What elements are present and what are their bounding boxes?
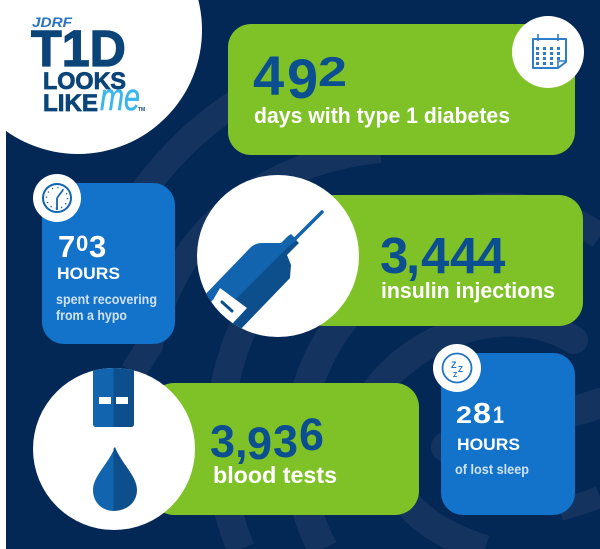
number: 3,444 bbox=[380, 227, 506, 284]
number: 281: 8 bbox=[473, 398, 491, 430]
icon: sleep bbox=[433, 344, 481, 392]
number: 3,936: 3 bbox=[273, 416, 298, 467]
number: 703: 3 bbox=[89, 229, 106, 264]
panel: insulin injections bbox=[300, 195, 583, 326]
number: 281: 1 bbox=[493, 402, 504, 429]
number: 3,936 bbox=[210, 409, 324, 469]
number: 3,444: 4 bbox=[421, 227, 450, 284]
logo: JDRF T1D Looks Like Me: me bbox=[100, 77, 140, 119]
logo: JDRF T1D Looks Like Me: TM bbox=[138, 107, 145, 113]
text: spent recovering from a hypo: from a hypo bbox=[56, 308, 127, 323]
background rings bbox=[133, 100, 600, 549]
label: hours: HOURS bbox=[457, 435, 520, 454]
panel: blood tests bbox=[150, 383, 419, 515]
logo: JDRF T1D Looks Like Me: LIKE bbox=[43, 90, 98, 117]
number: 3,444: 4 bbox=[450, 227, 479, 284]
icon: calendar bbox=[512, 16, 584, 88]
number: 3,444: 3 bbox=[380, 227, 408, 284]
text: spent recovering from a hypo bbox=[56, 292, 157, 323]
number: 492: 9 bbox=[287, 47, 318, 110]
icon: clock bbox=[33, 174, 81, 222]
number: 703: 7 bbox=[58, 229, 75, 264]
number: 3,936: , bbox=[235, 416, 248, 467]
logo: JDRF T1D Looks Like Me: T1D bbox=[31, 20, 126, 77]
panel: days with type 1 diabetes bbox=[228, 16, 584, 155]
logo: JDRF T1D Looks Like Me: JDRF bbox=[32, 15, 73, 30]
number: 3,936: 6 bbox=[299, 409, 324, 460]
label: days with type 1 diabetes: days with type 1 diabetes bbox=[254, 103, 510, 128]
label: hours: HOURS bbox=[57, 264, 120, 283]
text: of lost sleep: of lost sleep bbox=[455, 462, 529, 477]
number: 492 bbox=[253, 44, 347, 110]
icon: sleep: Z bbox=[458, 365, 463, 374]
icon: insulin pen bbox=[190, 175, 359, 345]
panel: logo disc bbox=[0, 0, 202, 549]
panel: hours recovering from a hypo bbox=[33, 174, 175, 344]
number: 492: 4 bbox=[253, 44, 284, 107]
panel: hours of lost sleep bbox=[433, 344, 575, 515]
logo: JDRF T1D Looks Like Me: LOOKS bbox=[43, 68, 126, 95]
number: 703: 0 bbox=[76, 231, 88, 256]
icon: sleep: Z bbox=[451, 360, 457, 370]
number: 3,936: 9 bbox=[247, 418, 272, 469]
number: 3,444: , bbox=[406, 227, 420, 284]
number: 3,444: 4 bbox=[477, 227, 506, 284]
logo: JDRF T1D Looks Like Me bbox=[31, 15, 145, 119]
label: blood tests: blood tests bbox=[213, 462, 337, 488]
text: spent recovering from a hypo: spent recovering bbox=[56, 292, 157, 307]
number: 281 bbox=[456, 398, 504, 430]
number: 492: 2 bbox=[318, 48, 347, 95]
number: 703 bbox=[58, 229, 106, 264]
icon: sleep: Z bbox=[453, 372, 458, 379]
icon: blood test strip and drop bbox=[33, 360, 195, 530]
number: 3,936: 3 bbox=[210, 416, 235, 467]
label: insulin injections: insulin injections bbox=[381, 278, 555, 303]
number: 281: 2 bbox=[456, 402, 472, 429]
